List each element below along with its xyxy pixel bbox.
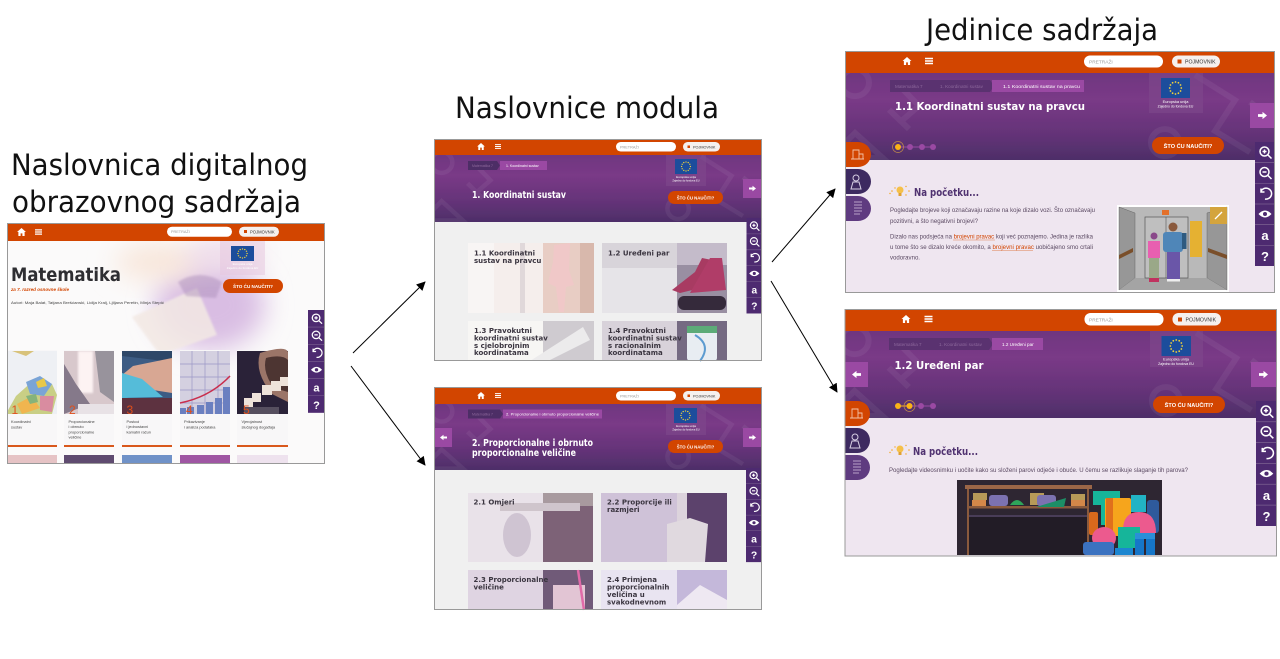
card 1.3 — [468, 321, 594, 361]
toolbar — [746, 468, 762, 562]
heading: Jedinice sadržaja: Jedinice sadržaja — [924, 13, 1158, 47]
header bar — [845, 51, 1275, 73]
progress dots — [895, 400, 936, 412]
toolbar — [1256, 401, 1277, 526]
toolbar: ? — [751, 302, 757, 313]
card 2.2 — [601, 493, 727, 562]
header bar — [434, 387, 762, 404]
card 3: credit card: kamatni račun — [126, 430, 151, 434]
toolbar: ? — [313, 400, 320, 412]
breadcrumb — [468, 410, 602, 418]
card 2.4: 2.4 Primjena — [607, 576, 657, 584]
card 4: growth chart: 4 — [186, 403, 193, 417]
breadcrumb: Matematika 7 — [472, 164, 493, 168]
card 4: growth chart — [180, 350, 230, 447]
EU logo — [1149, 73, 1203, 113]
card 2.3: veličine — [474, 584, 504, 592]
toolbar: a — [1263, 488, 1271, 503]
unit title: 1.2 Uređeni par — [894, 359, 984, 372]
header bar — [434, 139, 762, 155]
card 1.1: sustav na pravcu — [474, 257, 541, 265]
purple banner — [423, 152, 762, 222]
heading: Naslovnice modula: Naslovnice modula — [455, 91, 719, 125]
toolbar: ? — [751, 551, 757, 561]
card 2: office: 2 — [69, 403, 76, 417]
EU logo: Europska unija — [676, 424, 696, 428]
panel: digital content cover screenshot — [7, 223, 325, 464]
arrow: module to unit 1.1 — [772, 189, 835, 262]
intro text: pozitivni, a što negativni brojevi? — [890, 218, 978, 225]
card 1.4: 1.4 Pravokutni — [608, 327, 666, 335]
card 1.1: 1.1 Koordinatni — [474, 250, 535, 258]
card 5: dice: slučajnog događaja — [242, 424, 276, 430]
panel: module 1 cover screenshot — [423, 139, 762, 361]
card 2.1 — [468, 493, 593, 562]
EU logo: Zajedno do fondova EU — [1158, 362, 1194, 366]
header bar: POJMOVNIK — [1185, 60, 1216, 66]
second row of cards — [8, 455, 288, 463]
button: ŠTO ĆU NAUČITI? — [677, 444, 715, 450]
card 1: map: sustav — [11, 424, 22, 430]
card 2: office: Proporcionalne — [68, 419, 95, 424]
next arrow — [743, 428, 762, 447]
card 1.4 — [602, 321, 727, 361]
EU logo: Zajedno do fondova EU — [1158, 104, 1194, 108]
card 2: office: i obrnuto — [68, 424, 84, 429]
header bar — [844, 309, 1277, 331]
progress dots — [892, 142, 936, 152]
toolbar — [308, 310, 325, 413]
purple banner — [423, 401, 762, 470]
toolbar: ? — [1263, 509, 1271, 524]
EU logo: Europska unija — [1163, 356, 1190, 362]
arrow: module to unit 1.2 — [771, 281, 837, 392]
card 3: credit card: 3 — [126, 403, 134, 417]
next arrow — [1251, 362, 1276, 387]
button — [668, 191, 723, 204]
button: što ću naučiti — [223, 279, 283, 293]
panel: unit 1.1 screenshot — [830, 51, 1275, 293]
breadcrumb: Matematika 7 — [472, 412, 493, 416]
EU logo: Zajedno do fondova EU — [672, 428, 700, 432]
header bar: PRETRAŽI — [620, 144, 639, 150]
card 3: credit card: i jednostavni — [126, 424, 148, 429]
card 2: office: proporcionalne — [68, 430, 94, 434]
card 1.4: koordinatama — [608, 349, 663, 357]
card 5: dice — [237, 349, 288, 447]
unit title: 1.1 Koordinatni sustav na pravcu — [895, 100, 1085, 113]
purple banner — [830, 69, 1275, 160]
card 2.3 — [468, 570, 593, 610]
EU logo: Europska unija — [1163, 99, 1189, 104]
card 4: growth chart: Prikazivanje — [184, 419, 205, 424]
card 2.1: 2.1 Omjeri — [474, 498, 515, 506]
card 1.4: s racionalnim — [608, 342, 661, 350]
EU logo — [666, 404, 706, 435]
button: ŠTO ĆU NAUČITI? — [1164, 142, 1213, 150]
card 1: map — [7, 350, 57, 447]
breadcrumb: 2. Proporcionalne i obrnuto proporcionalne veličine — [506, 412, 599, 416]
card 2.4: veličina u — [607, 591, 645, 599]
toolbar — [746, 218, 762, 313]
card 3: credit card: Postoci — [126, 419, 139, 424]
card 2.3: 2.3 Proporcionalne — [474, 576, 548, 584]
purple banner — [829, 327, 1277, 418]
module title: proporcionalne veličine — [472, 447, 576, 459]
toolbar: a — [751, 535, 757, 545]
card 1: map: Koordinatni — [11, 419, 31, 424]
card 1.3: s cjelobrojnim — [474, 342, 529, 350]
EU logo: Zajedno do fondova EU — [227, 266, 258, 270]
side tabs — [844, 401, 870, 480]
heading: Naslovnica digitalnog obrazovnog sadržaja — [11, 148, 308, 219]
button: ŠTO ĆU NAUČITI? — [1165, 401, 1214, 409]
module title: 2. Proporcionalne i obrnuto — [472, 438, 593, 449]
heading: Na početku: Na početku... — [914, 187, 979, 199]
card 1.3: koordinatni sustav — [474, 334, 548, 342]
heading: Naslovnica digitalnog obrazovnog sadržaja: obrazovnog sadržaja — [12, 185, 301, 219]
breadcrumb: 1.2 Uređeni par — [1002, 342, 1034, 347]
heading: Naslovnica digitalnog obrazovnog sadržaja: Naslovnica digitalnog — [11, 148, 308, 182]
breadcrumb — [889, 338, 1043, 350]
breadcrumb: Matematika 7 — [895, 84, 923, 89]
arrow: cover to module 2 — [351, 366, 425, 465]
card 1.3: 1.3 Pravokutni — [474, 327, 532, 335]
button — [668, 440, 723, 453]
card 5: dice: 5 — [243, 403, 250, 417]
card 2.4: proporcionalnih — [607, 584, 669, 592]
header bar: PRETRAŽI — [171, 229, 190, 234]
card 1.4: koordinatni sustav — [608, 334, 682, 342]
toolbar — [1255, 142, 1275, 266]
heading: Na početku: Na početku... — [913, 446, 978, 458]
breadcrumb: 1. Koordinatni sustav — [939, 342, 983, 347]
illustration: elevator — [1117, 205, 1229, 292]
card 2.4: svakodnevnom — [607, 598, 666, 606]
card 2.2: 2.2 Proporcije ili — [607, 498, 672, 506]
intro text: Dizalo nas podsjeća na brojevni pravac koji već poznajemo. Jedina je razlika — [890, 234, 1093, 240]
button — [1152, 137, 1224, 154]
header bar: PRETRAŽI — [1089, 316, 1113, 324]
intro text: vodoravno. — [890, 254, 920, 262]
card 1.3: koordinatama — [474, 349, 529, 357]
EU logo: Europska unija — [676, 175, 696, 179]
intro text: Pogledajte videosnimku i uočite kako su složeni parovi odjeće i obuće. U čemu se razlikuje slaganje tih parova? — [889, 467, 1188, 474]
header bar: POJMOVNIK — [1186, 318, 1217, 324]
previous arrow — [435, 428, 452, 447]
heading: Na početku — [889, 186, 979, 199]
intro text: u tome što se dizalo kreće okomito, a brojevni pravac uobičajeno smo crtali — [890, 244, 1093, 251]
title: Matematika: Matematika — [11, 264, 121, 286]
header bar: POJMOVNIK — [693, 146, 716, 150]
toolbar: a — [751, 286, 758, 296]
breadcrumb: 1.1 Koordinatni sustav na pravcu — [1003, 84, 1081, 89]
intro text — [890, 205, 1095, 262]
header bar: PRETRAŽI — [1089, 58, 1113, 66]
module title — [472, 438, 593, 459]
expand button — [1210, 207, 1227, 224]
card 5: dice: Vjerojatnost — [242, 419, 263, 424]
header bar: POJMOVNIK — [250, 230, 275, 234]
breadcrumb: 1. Koordinatni sustav — [506, 164, 539, 168]
card 4: growth chart: i analiza podataka — [184, 424, 216, 430]
card 1.2 — [602, 243, 727, 313]
EU logo — [666, 155, 706, 186]
intro text: Pogledajte brojeve koji označavaju razine na koje dizalo vozi. Što označavaju — [890, 205, 1095, 214]
card 2.4 — [601, 570, 727, 610]
breadcrumb: 1. Koordinatni sustav — [940, 84, 984, 89]
button: što ću naučiti: ŠTO ĆU NAUČITI? — [233, 282, 273, 289]
breadcrumb — [890, 80, 1084, 92]
module title: 1. Koordinatni sustav — [472, 190, 566, 201]
card 2: office: veličine — [68, 434, 81, 440]
panel: unit 1.2 screenshot — [829, 309, 1277, 556]
next arrow — [1250, 103, 1275, 128]
EU logo — [1150, 331, 1203, 367]
toolbar: a — [313, 382, 321, 394]
breadcrumb — [468, 161, 547, 170]
toolbar: a — [1261, 228, 1269, 243]
next arrow — [743, 179, 762, 198]
heading: Na početku — [889, 445, 978, 458]
header bar: POJMOVNIK — [693, 394, 716, 398]
card 1: map: 1 — [12, 403, 18, 417]
card 1.1 — [468, 243, 594, 313]
toolbar: ? — [1261, 249, 1269, 264]
button: ŠTO ĆU NAUČITI? — [677, 196, 715, 200]
breadcrumb: Matematika 7 — [894, 342, 922, 347]
header bar: PRETRAŽI — [620, 394, 639, 398]
EU logo: Zajedno do fondova EU — [672, 178, 700, 182]
illustration: wardrobe — [957, 480, 1162, 555]
EU logo — [227, 246, 258, 270]
previous arrow — [845, 362, 868, 387]
card 2.2: razmjeri — [607, 506, 640, 514]
button — [1153, 396, 1225, 413]
subtitle: za 7. razred osnovne škole — [10, 287, 70, 292]
card 3: credit card — [122, 350, 172, 447]
arrow: cover to module 1 — [353, 282, 425, 353]
card 2: office — [64, 350, 114, 447]
header bar — [7, 223, 325, 241]
EU logo: Europska unija — [233, 262, 253, 266]
card 1.2: 1.2 Uređeni par — [608, 250, 670, 258]
authors: Autori: Maja Balat, Tatjana Brešćanski, Lidija Kralj, Ljiljana Peretin, Minja Stepić — [11, 300, 164, 305]
panel: module 2 cover screenshot — [423, 387, 762, 610]
side tabs — [845, 142, 871, 221]
